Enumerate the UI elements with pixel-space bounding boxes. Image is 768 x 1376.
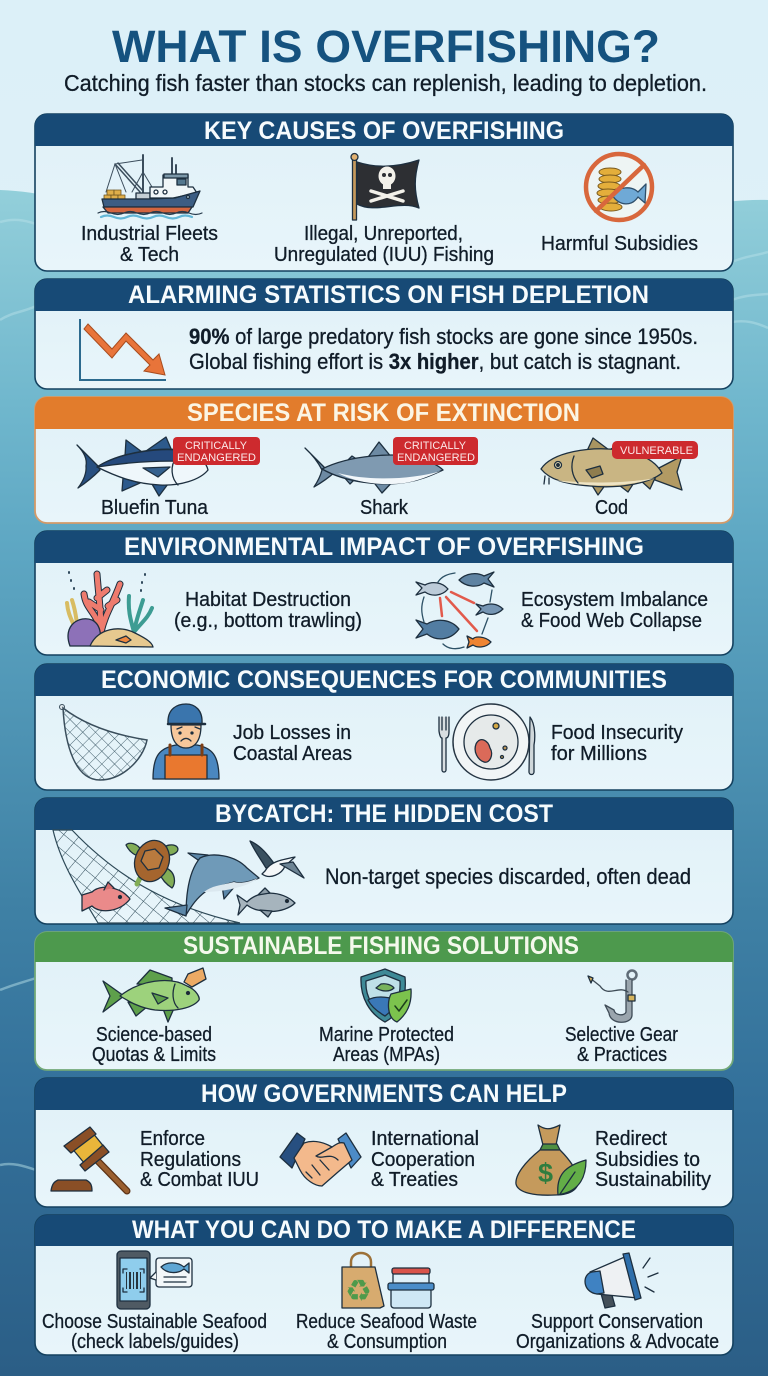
badge: critically endangered: ENDANGERED [177,452,256,464]
heading: species at risk: SPECIES AT RISK OF EXTINCTION [187,399,580,427]
label: ecosystem imbalance: Ecosystem Imbalance [521,588,708,611]
label: redirect subsidies: Redirect [595,1127,667,1150]
label: food insecurity: Food Insecurity [551,721,684,744]
badge: critically endangered: ENDANGERED [397,452,475,464]
icon: selective hook [588,970,636,1022]
heading: what you can do: WHAT YOU CAN DO TO MAKE A DIFFERENCE [132,1216,636,1244]
label: iuu fishing: Illegal, Unreported, [304,222,463,245]
icon: gavel [51,1127,127,1191]
panel: environmental impact [35,531,733,655]
label: international cooperation: & Treaties [371,1168,458,1191]
icon: empty fishing net [60,704,147,780]
label: science-based quotas: Science-based [96,1023,212,1046]
stat text [189,324,698,374]
icon: bluefin tuna [77,437,208,496]
label: job losses [233,721,352,765]
label: support conservation [516,1310,719,1353]
label: ecosystem imbalance: & Food Web Collapse [521,609,702,632]
label: selective gear [565,1023,678,1066]
stat text: Global fishing effort is 3x higher, but catch is stagnant. [189,349,681,374]
label: selective gear: & Practices [577,1043,667,1066]
badge: vulnerable [612,441,698,459]
label: selective gear: Selective Gear [565,1023,678,1046]
label: redirect subsidies [595,1127,712,1191]
icon: shark [305,442,443,493]
badge: critically endangered: CRITICALLY [185,440,248,452]
label: job losses: Job Losses in [233,721,351,744]
label: marine protected areas: Marine Protected [319,1023,454,1046]
label: bycatch description: Non-target species discarded, often dead [325,864,691,889]
heading: governments [35,1078,733,1110]
label: international cooperation: Cooperation [371,1148,475,1171]
label: reduce waste: & Consumption [327,1330,447,1353]
heading: environmental impact [35,531,733,563]
icon: empty plate with cutlery [439,704,535,780]
label: habitat destruction: (e.g., bottom trawling) [174,609,362,632]
icon: megaphone [585,1253,658,1308]
icon: grey fish [237,888,295,917]
icon: tagged green fish [103,968,206,1022]
label: international cooperation: International [371,1127,479,1150]
icon: cod [541,438,682,495]
panel: bycatch [35,798,733,924]
label: marine protected areas: Areas (MPAs) [333,1043,440,1066]
panel: alarming statistics [35,279,733,389]
heading: environmental impact: ENVIRONMENTAL IMPACT OF OVERFISHING [124,533,644,561]
icon: seagull [250,841,304,878]
panel: economic consequences [35,664,733,790]
label: cod: Cod [595,496,628,519]
heading: bycatch [35,798,733,830]
heading: key causes [35,114,733,146]
icon: food web [416,572,503,649]
heading: alarming statistics: ALARMING STATISTICS ON FISH DEPLETION [128,281,649,309]
heading: governments: HOW GOVERNMENTS CAN HELP [201,1080,567,1108]
label: support conservation: Organizations & Advocate [516,1330,719,1353]
icon: money bag with leaf: $ [538,1158,553,1188]
label: industrial fleets [81,222,218,266]
icon: sea turtle [126,835,179,888]
panel: key causes [35,114,733,271]
panel: sustainable solutions [35,932,733,1070]
label: enforce regulations: Enforce [140,1127,205,1150]
heading: alarming statistics [35,279,733,311]
label: industrial fleets: & Tech [120,243,179,266]
label: enforce regulations [140,1127,259,1191]
subtitle: Catching fish faster than stocks can replenish, leading to depletion. [64,70,707,96]
label: food insecurity [551,721,684,765]
heading: economic consequences: ECONOMIC CONSEQUENCES FOR COMMUNITIES [101,666,667,694]
label: reduce waste: Reduce Seafood Waste [296,1310,477,1333]
badge: critically endangered: CRITICALLY [404,440,467,452]
heading: species at risk [35,397,733,429]
icon: trawl net [53,830,240,923]
panel: what you can do [35,1215,733,1355]
icon: sad fisherman [153,704,219,779]
label: choose sustainable seafood: Choose Sustainable Seafood [42,1310,267,1333]
icon: money bag with leaf [516,1125,586,1195]
icon: recycling bag [342,1253,384,1308]
icon: coral reef [67,572,153,647]
heading: sustainable solutions [35,932,733,962]
heading: sustainable solutions: SUSTAINABLE FISHING SOLUTIONS [183,932,579,960]
icon: no subsidies sign [586,154,652,220]
label: enforce regulations: & Combat IUU [140,1168,259,1191]
icon: food containers [388,1268,434,1308]
icon: pirate flag [351,154,419,220]
label: job losses: Coastal Areas [233,742,352,765]
label: international cooperation [371,1127,479,1191]
label: iuu fishing [274,222,494,266]
heading: key causes: KEY CAUSES OF OVERFISHING [204,117,564,145]
label: support conservation: Support Conservation [531,1310,703,1333]
badge: critically endangered [173,437,260,465]
title: WHAT IS OVERFISHING? [112,21,660,72]
label: science-based quotas: Quotas & Limits [92,1043,216,1066]
label: redirect subsidies: Subsidies to [595,1148,700,1171]
icon: fishing trawler [98,155,202,218]
icon: dolphin [165,853,259,916]
label: reduce waste [296,1310,477,1353]
label: marine protected areas [319,1023,454,1066]
heading: bycatch: BYCATCH: THE HIDDEN COST [215,800,553,828]
panel: species at risk [35,397,733,523]
icon: marine protected area shield [361,969,411,1022]
badge: critically endangered [393,437,478,465]
icon: recycling bag: ♻ [345,1275,372,1308]
label: harmful subsidies: Harmful Subsidies [541,232,698,255]
stat text: 90% of large predatory fish stocks are gone since 1950s. [189,324,698,349]
label: iuu fishing: Unregulated (IUU) Fishing [274,243,494,266]
label: habitat destruction [174,588,362,632]
label: food insecurity: for Millions [551,742,647,765]
icon: reef fish [82,882,130,911]
badge: vulnerable: VULNERABLE [620,445,693,457]
label: bluefin tuna: Bluefin Tuna [101,496,209,519]
label: science-based quotas [92,1023,216,1066]
panel: how governments can help [35,1078,733,1207]
icon: phone scanning label [117,1251,192,1309]
chart: declining trend arrow [80,319,166,380]
label: choose sustainable seafood [42,1310,267,1353]
label: habitat destruction: Habitat Destruction [185,588,351,611]
label: enforce regulations: Regulations [140,1148,241,1171]
label: shark: Shark [360,496,409,519]
icon: handshake [280,1133,361,1186]
label: ecosystem imbalance [521,588,708,632]
label: industrial fleets: Industrial Fleets [81,222,218,245]
label: redirect subsidies: Sustainability [595,1168,712,1191]
label: choose sustainable seafood: (check labels/guides) [71,1330,239,1353]
